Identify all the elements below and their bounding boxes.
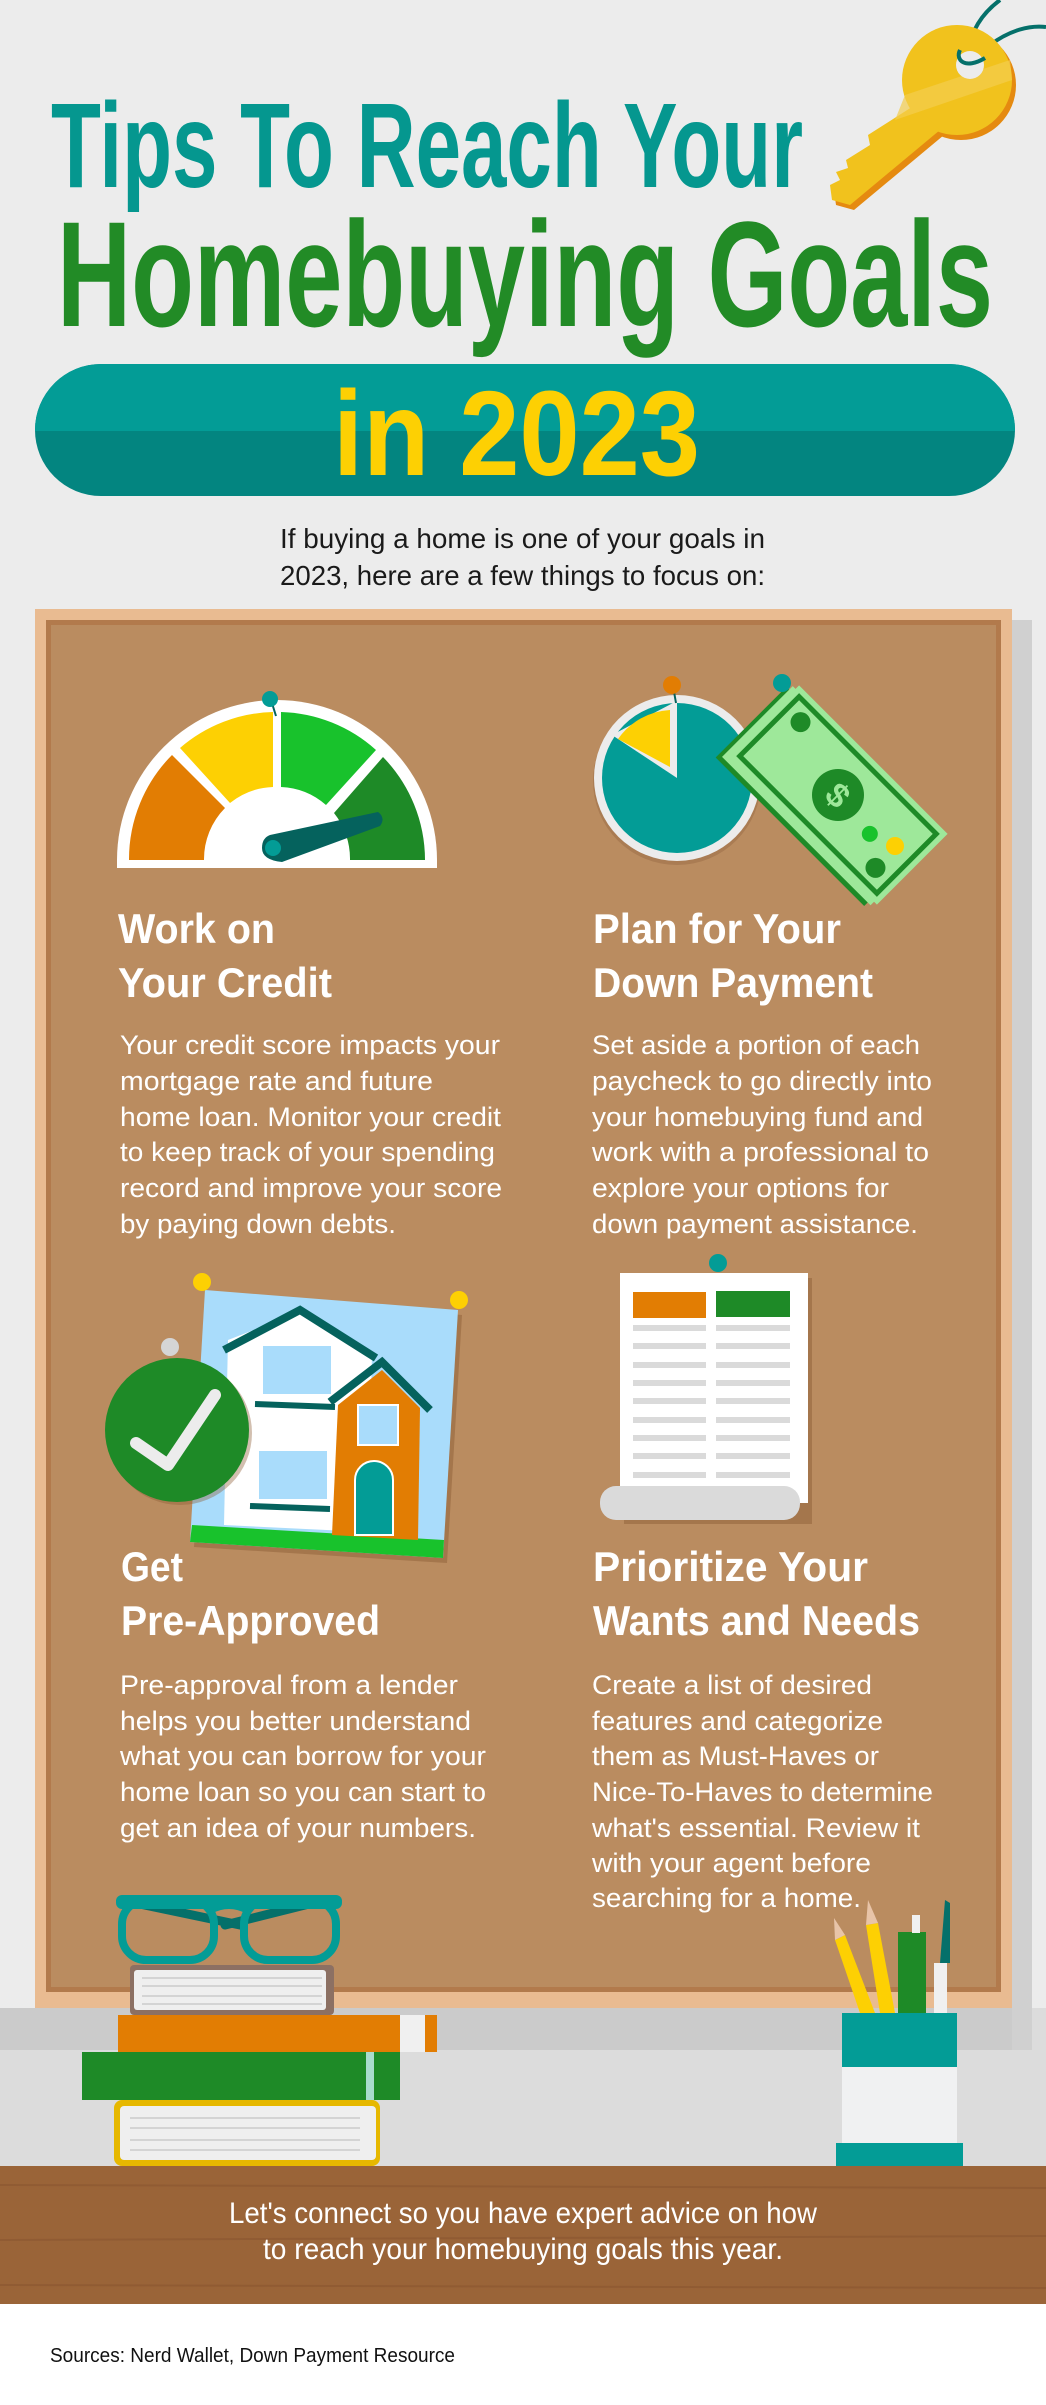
sources: Sources: Nerd Wallet, Down Payment Resource <box>50 2345 455 2367</box>
text: wants and needs body: searching for a home. <box>592 1883 861 1913</box>
text: wants and needs body <box>591 1670 933 1913</box>
heading: plan for your down payment: Down Payment <box>593 959 873 1006</box>
heading: prioritize your wants and needs: Prioritize Your <box>593 1543 868 1590</box>
heading: prioritize your wants and needs: Wants and Needs <box>593 1597 920 1644</box>
footer: wood band: to reach your homebuying goals this year. <box>263 2233 783 2266</box>
text: pre-approved body: helps you better understand <box>120 1706 471 1736</box>
text: down payment body: paycheck to go directly into <box>592 1066 932 1096</box>
footer: wood band: Let's connect so you have expert advice on how <box>229 2197 817 2230</box>
heading: get pre-approved: Get <box>121 1543 183 1590</box>
heading: get pre-approved <box>121 1543 380 1644</box>
icon: pencil cup <box>834 1900 963 2166</box>
text: pre-approved body: what you can borrow for your <box>119 1741 486 1771</box>
icon: glasses and books <box>82 1895 437 2166</box>
icon: pie chart and money <box>593 674 948 912</box>
text: credit body: record and improve your score <box>120 1173 502 1203</box>
text: pre-approved body: get an idea of your numbers. <box>120 1813 476 1843</box>
icon: pie chart and money: $ <box>817 776 857 816</box>
text: wants and needs body: them as Must-Haves or <box>592 1741 879 1771</box>
text: credit body <box>120 1030 502 1239</box>
heading: prioritize your wants and needs <box>593 1543 920 1644</box>
icon: wants and needs list <box>600 1254 812 1524</box>
heading: work on your credit <box>118 905 332 1006</box>
heading: plan for your down payment <box>593 905 873 1006</box>
panel: corkboard <box>35 609 1012 2008</box>
intro text: If buying a home is one of your goals in <box>280 523 765 554</box>
text: wants and needs body: Nice-To-Haves to determine <box>592 1777 933 1807</box>
icon: credit gauge <box>117 691 437 868</box>
heading: get pre-approved: Pre-Approved <box>121 1597 380 1644</box>
heading: work on your credit: Work on <box>118 905 275 952</box>
text: credit body: mortgage rate and future <box>120 1066 433 1096</box>
text: credit body: by paying down debts. <box>120 1209 396 1239</box>
text: wants and needs body: features and categorize <box>592 1706 883 1736</box>
text: pre-approved body: Pre-approval from a lender <box>120 1670 458 1700</box>
footer: wood band <box>0 2166 1046 2304</box>
text: pre-approved body <box>119 1670 486 1843</box>
text: down payment body: work with a professional to <box>591 1137 929 1167</box>
banner: in 2023 <box>35 364 1015 501</box>
icon: house poster with check <box>105 1273 468 1563</box>
text: pre-approved body: home loan so you can start to <box>120 1777 486 1807</box>
text: down payment body: Set aside a portion of each <box>592 1030 920 1060</box>
text: credit body: Your credit score impacts your <box>120 1030 500 1060</box>
intro text <box>280 523 765 591</box>
icon: key <box>830 0 1046 210</box>
heading: plan for your down payment: Plan for Your <box>593 905 841 952</box>
text: down payment body: down payment assistance. <box>592 1209 918 1239</box>
intro text: 2023, here are a few things to focus on: <box>280 560 765 591</box>
text: credit body: to keep track of your spending <box>120 1137 495 1167</box>
text: wants and needs body: what's essential. Review it <box>591 1813 921 1843</box>
text: down payment body: your homebuying fund and <box>592 1102 923 1132</box>
banner: in 2023: in 2023 <box>333 365 700 501</box>
text: down payment body <box>591 1030 932 1239</box>
heading: work on your credit: Your Credit <box>118 959 332 1006</box>
text: down payment body: explore your options for <box>592 1173 889 1203</box>
text: credit body: home loan. Monitor your credit <box>120 1102 502 1132</box>
text: wants and needs body: Create a list of desired <box>592 1670 872 1700</box>
text: wants and needs body: with your agent before <box>591 1848 871 1878</box>
